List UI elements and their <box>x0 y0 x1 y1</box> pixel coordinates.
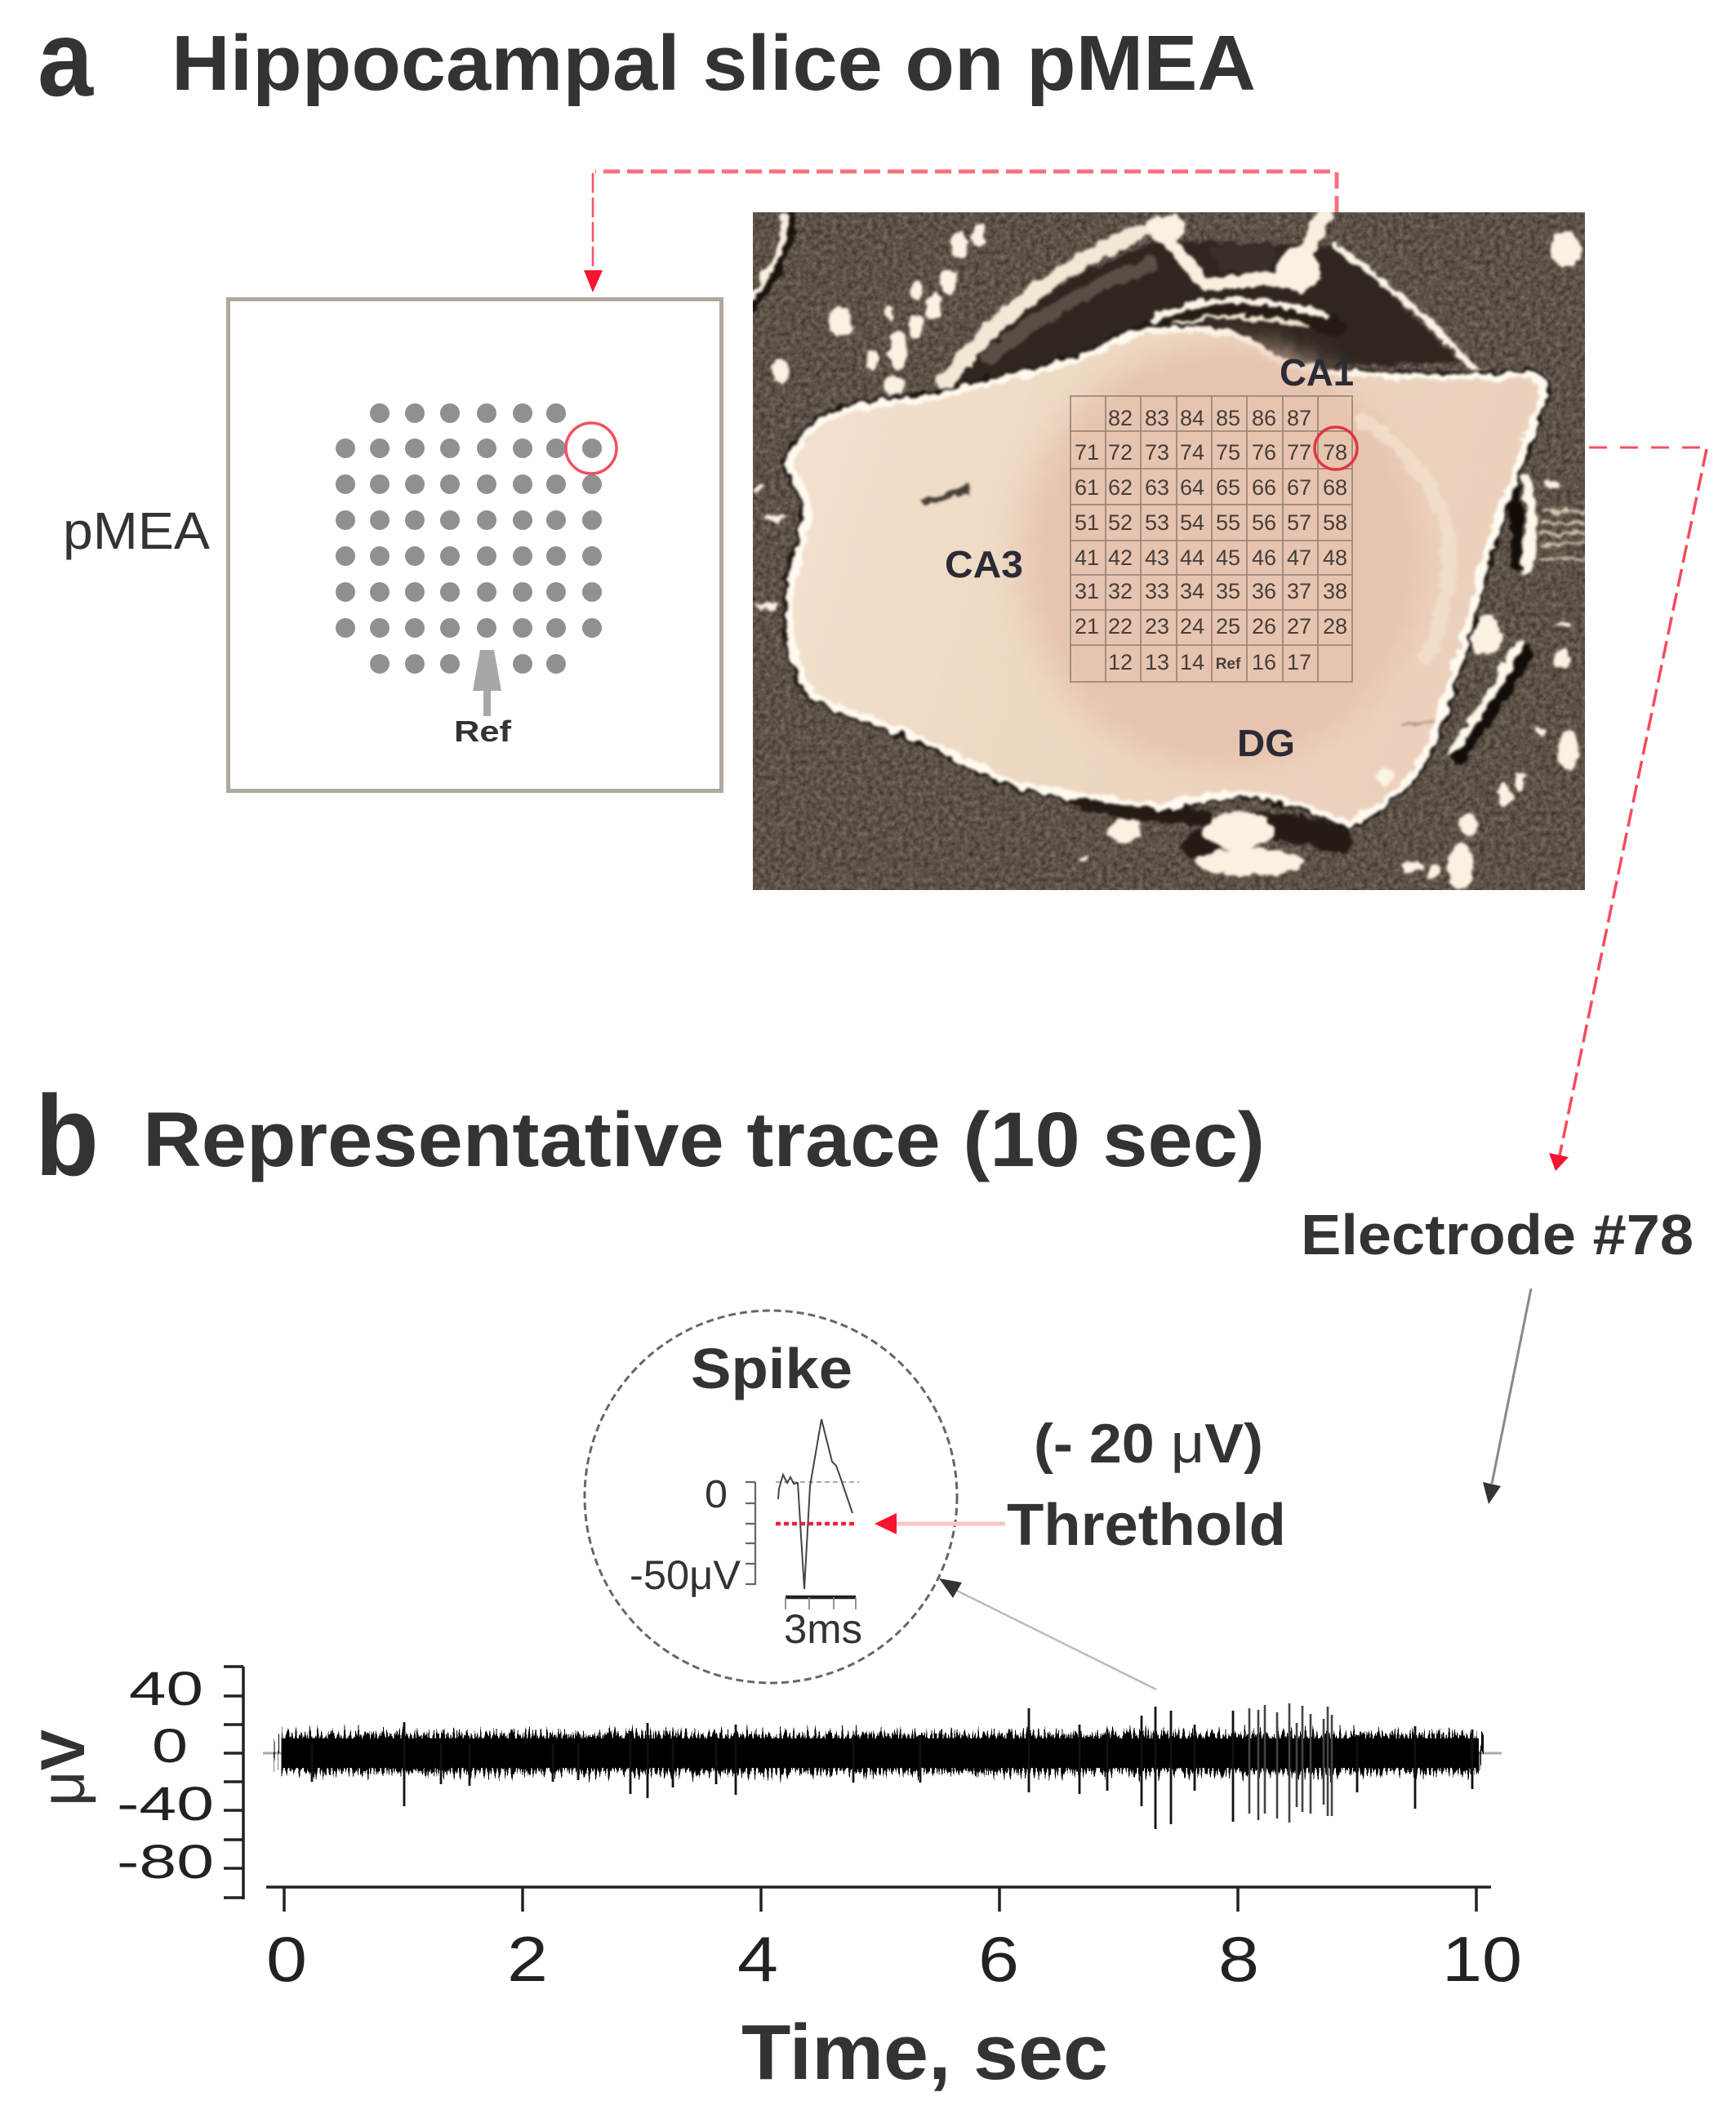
burst spike events <box>1249 1703 1332 1823</box>
x tick labels: 4 <box>737 1923 778 1995</box>
electrode numbers: 23 <box>1145 614 1169 639</box>
label: minus 20 microvolts: (- 20 μV) <box>1034 1413 1263 1475</box>
x tick labels: 0 <box>266 1923 307 1995</box>
electrode numbers: 44 <box>1180 545 1204 570</box>
chart: voltage trace <box>29 1663 1522 2096</box>
electrode numbers: 16 <box>1252 650 1276 674</box>
grid lines <box>1071 396 1352 682</box>
x tick labels <box>266 1923 1522 1995</box>
x tick labels: 8 <box>1218 1923 1259 1995</box>
outer ring structures <box>751 214 1584 847</box>
label: Threthold: Threthold <box>1007 1493 1286 1558</box>
time scale ticks <box>786 1597 856 1609</box>
electrode numbers: 64 <box>1180 475 1204 500</box>
electrode numbers: 14 <box>1180 650 1204 674</box>
electrode numbers: 37 <box>1287 579 1311 603</box>
electrode numbers: 28 <box>1323 614 1347 639</box>
white patch near lower edge <box>1378 768 1392 785</box>
electrode numbers: 45 <box>1216 545 1240 570</box>
panel label a: a <box>38 0 94 118</box>
electrode numbers: 43 <box>1145 545 1169 570</box>
noise band core <box>282 1738 1479 1768</box>
electrode numbers: 32 <box>1108 579 1133 603</box>
arrow: reference electrode <box>473 650 501 716</box>
electrode numbers: 31 <box>1075 579 1099 603</box>
electrode numbers: 33 <box>1145 579 1169 603</box>
y axis <box>224 1667 243 1899</box>
electrode numbers: 72 <box>1108 440 1133 465</box>
spike events <box>312 1707 1472 1829</box>
electrode numbers: 22 <box>1108 614 1133 639</box>
electrode numbers: 41 <box>1075 545 1099 570</box>
photo background <box>753 212 1585 890</box>
electrode numbers: 53 <box>1145 510 1169 535</box>
electrode numbers: 25 <box>1216 614 1240 639</box>
arrow: electrode to trace <box>1483 1289 1531 1504</box>
dashed magnifier circle <box>585 1311 957 1683</box>
electrode numbers <box>1075 406 1347 674</box>
y tick labels: -80 <box>117 1836 214 1889</box>
electrode dots <box>336 403 602 674</box>
electrode numbers: 86 <box>1252 406 1276 430</box>
electrode numbers: Ref <box>1216 656 1241 673</box>
electrode numbers: 87 <box>1287 406 1311 430</box>
electrode numbers: 55 <box>1216 510 1240 535</box>
electrode numbers: 63 <box>1145 475 1169 500</box>
tissue tear mark <box>922 488 971 502</box>
ring blobs and specks <box>753 214 1582 889</box>
heading: Hippocampal slice on pMEA: Hippocampal slice on pMEA <box>171 20 1256 107</box>
photo: hippocampal slice on array <box>751 212 1585 890</box>
electrode numbers: 36 <box>1252 579 1276 603</box>
y label: -50 microvolts: -50μV <box>630 1552 741 1598</box>
y axis label: microvolts: μV <box>29 1729 98 1806</box>
noise band bottom edge <box>282 1752 1480 1772</box>
highlight circle: electrode 78 <box>566 423 617 474</box>
x tick labels: 6 <box>978 1923 1019 1995</box>
electrode numbers: 62 <box>1108 475 1133 500</box>
electrode numbers: 76 <box>1252 440 1276 465</box>
electrode numbers: 78 <box>1323 440 1347 465</box>
y tick labels: -40 <box>117 1778 214 1831</box>
x axis <box>266 1887 1491 1912</box>
label: pMEA: pMEA <box>63 501 210 560</box>
label: DG: DG <box>1237 722 1295 764</box>
x axis title: Time, sec <box>741 2009 1108 2096</box>
pale band around dentate <box>1358 416 1450 664</box>
electrode numbers: 13 <box>1145 650 1169 674</box>
electrode numbers: 47 <box>1287 545 1311 570</box>
electrode numbers: 21 <box>1075 614 1099 639</box>
panel frame <box>229 299 722 790</box>
electrode numbers: 38 <box>1323 579 1347 603</box>
x tick labels: 2 <box>507 1923 548 1995</box>
y tick labels: 0 <box>152 1720 188 1773</box>
electrode numbers: 26 <box>1252 614 1276 639</box>
y tick labels <box>117 1663 214 1889</box>
spike waveform trace <box>778 1419 852 1589</box>
highlight circle: 78 <box>1315 427 1357 470</box>
overlay: electrode number grid <box>1071 396 1357 682</box>
label: CA1: CA1 <box>1280 351 1354 394</box>
electrode numbers: 42 <box>1108 545 1133 570</box>
arrow: burst to spike inset <box>939 1578 1156 1689</box>
y tick labels: 40 <box>129 1663 203 1716</box>
dark trapezoid at top <box>1206 246 1276 273</box>
electrode numbers: 51 <box>1075 510 1099 535</box>
electrode numbers: 34 <box>1180 579 1204 603</box>
electrode numbers: 65 <box>1216 475 1240 500</box>
electrode numbers: 84 <box>1180 406 1204 430</box>
electrode numbers: 71 <box>1075 440 1099 465</box>
dark wedge between ring and slice <box>946 241 1461 394</box>
slice and rings <box>751 214 1584 889</box>
electrode numbers: 82 <box>1108 406 1133 430</box>
heading: Representative trace (10 sec): Representative trace (10 sec) <box>143 1097 1265 1183</box>
panel label b: b <box>35 1071 99 1200</box>
electrode numbers: 57 <box>1287 510 1311 535</box>
electrode numbers: 27 <box>1287 614 1311 639</box>
label: CA3: CA3 <box>945 543 1023 585</box>
arrow: threshold pointer <box>875 1513 1005 1534</box>
electrode numbers: 24 <box>1180 614 1204 639</box>
electrode numbers: 66 <box>1252 475 1276 500</box>
electrode numbers: 48 <box>1323 545 1347 570</box>
electrode numbers: 77 <box>1287 440 1311 465</box>
electrode numbers: 83 <box>1145 406 1169 430</box>
panel: pMEA electrode layout <box>229 299 722 790</box>
electrode numbers: 67 <box>1287 475 1311 500</box>
label: Electrode #78: Electrode #78 <box>1301 1203 1694 1266</box>
arrow: dashed connector photo to electrode trace <box>1549 447 1708 1171</box>
spike zero line <box>776 1481 859 1483</box>
slice dark halo <box>789 329 1544 824</box>
electrode numbers: 74 <box>1180 440 1204 465</box>
darker dentate region <box>1022 345 1422 768</box>
threshold dotted line <box>776 1522 857 1525</box>
electrode numbers: 68 <box>1323 475 1347 500</box>
electrode numbers: 75 <box>1216 440 1240 465</box>
y label: 0: 0 <box>705 1473 728 1516</box>
electrode numbers: 54 <box>1180 510 1204 535</box>
label: Ref: Ref <box>454 714 512 748</box>
electrode numbers: 58 <box>1323 510 1347 535</box>
label: Spike: Spike <box>691 1337 852 1400</box>
electrode numbers: 85 <box>1216 406 1240 430</box>
electrode numbers: 52 <box>1108 510 1133 535</box>
x tick labels: 10 <box>1442 1923 1522 1995</box>
electrode numbers: 73 <box>1145 440 1169 465</box>
zero baseline <box>263 1752 1502 1754</box>
arrow: dashed connector photo to pMEA <box>584 171 1337 292</box>
electrode numbers: 35 <box>1216 579 1240 603</box>
electrode numbers: 46 <box>1252 545 1276 570</box>
y scale bar <box>746 1482 755 1585</box>
electrode numbers: 12 <box>1108 650 1133 674</box>
label: 3ms: 3ms <box>784 1606 862 1652</box>
slice tissue <box>789 329 1544 824</box>
electrode numbers: 56 <box>1252 510 1276 535</box>
inset: spike waveform <box>585 1311 957 1683</box>
electrode numbers: 17 <box>1287 650 1311 674</box>
time scale bar <box>786 1596 856 1599</box>
electrode numbers: 61 <box>1075 475 1099 500</box>
noise band top edge <box>282 1734 1480 1754</box>
